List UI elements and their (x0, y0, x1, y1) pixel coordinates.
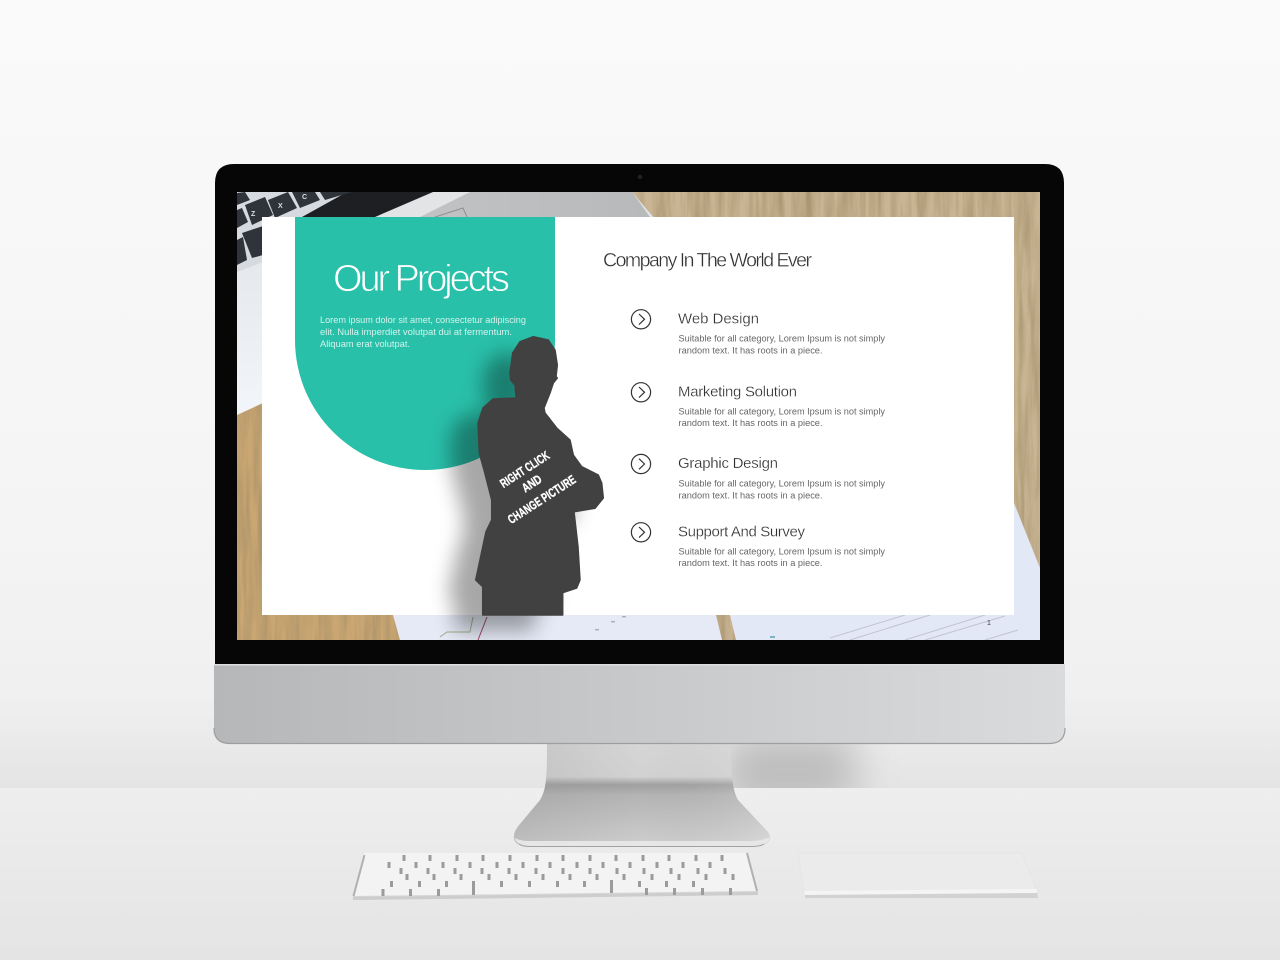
item description (678, 479, 886, 500)
item description (678, 546, 886, 568)
panel: teal shape (295, 217, 555, 470)
slide background photo (237, 192, 1040, 640)
silhouette caption (498, 449, 578, 527)
slide white panel (262, 217, 1014, 615)
list item: Support And Survey (631, 523, 886, 568)
silhouette caption: RIGHT CLICK (498, 449, 552, 491)
list item: Marketing Solution (631, 383, 886, 428)
item description: Suitable for all category, Lorem Ipsum is not simply (678, 334, 886, 344)
item description: random text. It has roots in a piece. (678, 345, 822, 355)
keyboard key gaps (382, 855, 734, 896)
heading: Company In The World Ever: Company In The World Ever (603, 250, 812, 272)
item description (678, 334, 886, 355)
monitor (214, 164, 1065, 744)
heading: Our Projects: Our Projects (333, 258, 510, 300)
papers: 1 (987, 620, 991, 627)
silhouette caption: AND (519, 472, 544, 495)
text block: intro: elit. Nulla imperdiet volutpat dui at fermentum. (320, 327, 512, 337)
list item: Graphic Design (631, 454, 886, 500)
item description (678, 406, 886, 428)
wireless keyboard (353, 853, 758, 900)
wood desk (237, 192, 1040, 640)
item title: Support And Survey (678, 524, 806, 541)
text block: intro (320, 315, 526, 349)
text block: intro: Lorem ipsum dolor sit amet, consectetur adipiscing (320, 315, 526, 325)
item title: Marketing Solution (678, 384, 797, 401)
laptop (237, 192, 660, 415)
monitor chin (214, 664, 1065, 744)
papers (393, 503, 1040, 640)
item description: Suitable for all category, Lorem Ipsum is not simply (678, 546, 886, 556)
item description: random text. It has roots in a piece. (678, 490, 822, 500)
text block: intro: Aliquam erat volutpat. (320, 339, 410, 349)
laptop: Z (251, 211, 256, 218)
monitor bezel (215, 164, 1064, 664)
monitor stand (514, 744, 770, 846)
silhouette caption: CHANGE PICTURE (505, 473, 578, 527)
silhouette shadow (448, 353, 575, 631)
icon: chevron circle (631, 523, 651, 542)
trackpad (798, 853, 1038, 898)
laptop: C (302, 194, 307, 201)
item title: Graphic Design (678, 455, 778, 472)
icon: chevron circle (631, 310, 651, 329)
item description: Suitable for all category, Lorem Ipsum is not simply (678, 406, 886, 416)
item title: Web Design (678, 310, 759, 327)
laptop: X (278, 203, 283, 210)
list item: Web Design (631, 310, 886, 355)
background: wall and desk (0, 711, 1280, 960)
silhouette placeholder picture (476, 337, 603, 615)
icon: chevron circle (631, 383, 651, 402)
item description: random text. It has roots in a piece. (678, 418, 822, 428)
item description: random text. It has roots in a piece. (678, 558, 822, 568)
item description: Suitable for all category, Lorem Ipsum is not simply (678, 479, 886, 489)
icon: chevron circle (631, 454, 651, 474)
webcam (638, 175, 642, 179)
